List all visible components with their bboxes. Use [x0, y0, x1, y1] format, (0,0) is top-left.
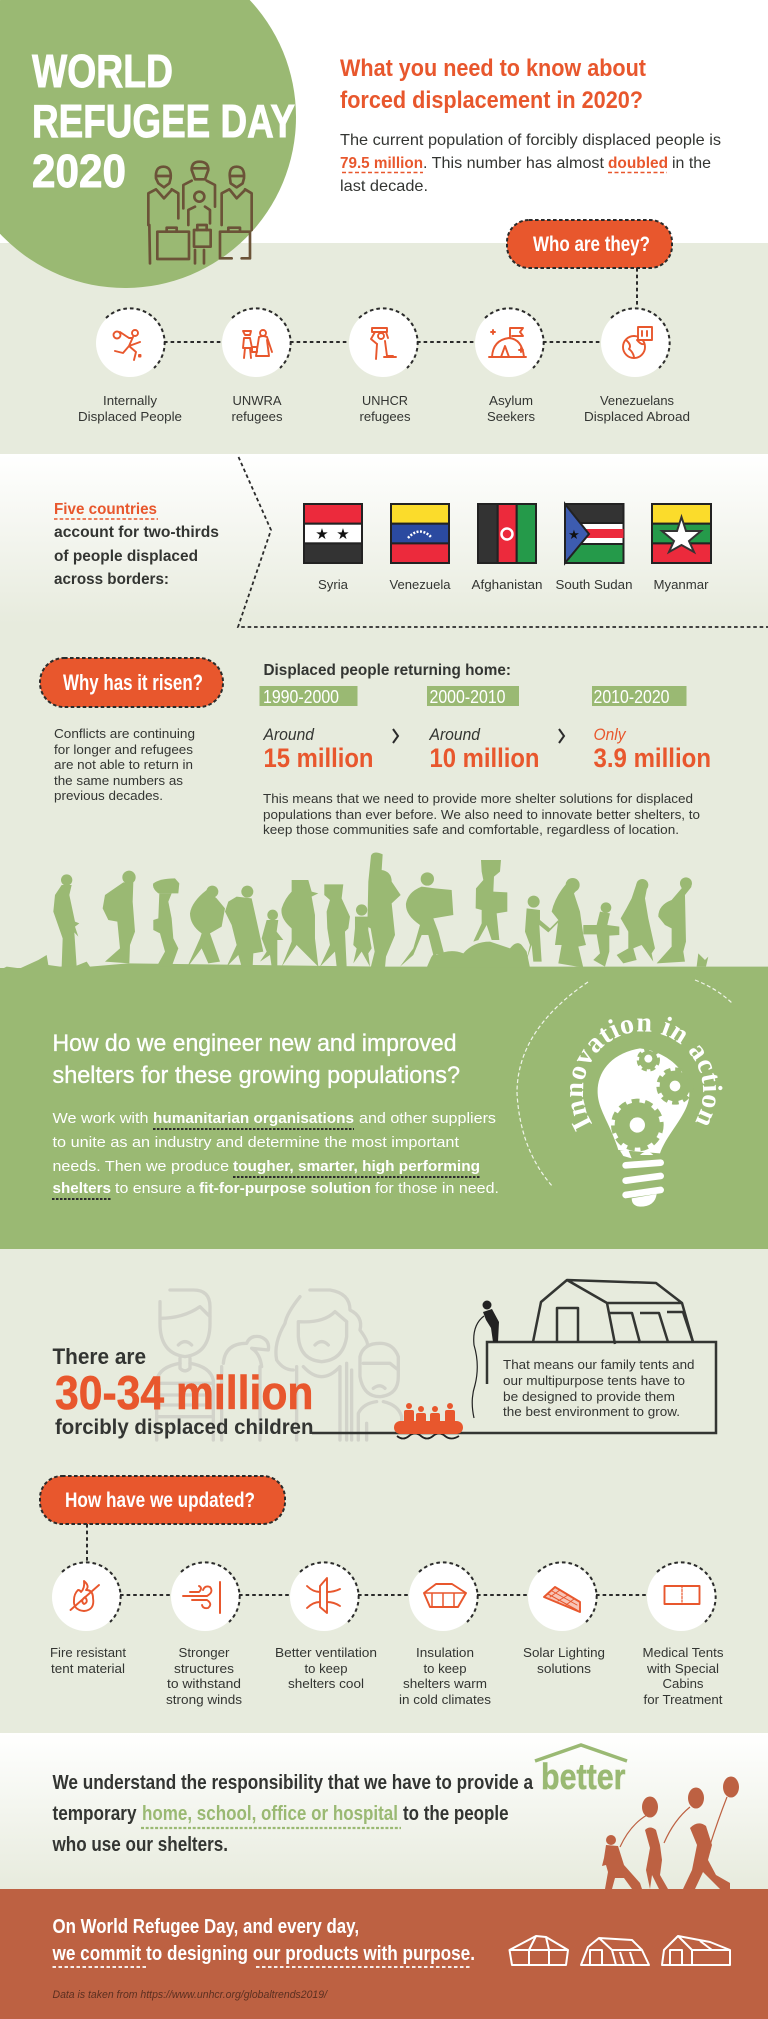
labels: who are they: Seekers — [487, 409, 535, 424]
divider: dashed chevron — [238, 457, 768, 627]
icon: lightbulb with gears — [598, 1048, 690, 1207]
heading: what you need to know — [340, 55, 646, 114]
icon: medical tents — [647, 1562, 716, 1631]
icon: strong winds — [171, 1562, 240, 1631]
text block: conflicts: previous decades. — [54, 788, 163, 803]
text block: five countries: Five countries — [54, 501, 157, 518]
text block: how we work: fit-for-purpose solution — [199, 1180, 371, 1197]
stat: 1990-2000: 1990-2000 — [263, 687, 339, 707]
text block: more shelter solutions: This means that we need to provide more shelter solutions for displaced — [263, 791, 693, 806]
arrow: 2000s to 2010s — [559, 729, 564, 743]
closing statement: we commit to designing our products with purpose. — [52, 1943, 475, 1965]
labels: updates: to withstand — [167, 1676, 241, 1691]
labels: updates: for Treatment — [644, 1692, 723, 1707]
icon: tent two — [581, 1938, 649, 1965]
labels: who are they: UNWRA — [232, 393, 282, 408]
text block: population: 79.5 million — [340, 155, 423, 172]
better with roof — [535, 1745, 627, 1797]
text block: how we work: needs. Then we produce — [52, 1158, 229, 1175]
callout: why has it risen: Why has it risen? — [63, 670, 203, 695]
icon: fire resistant — [52, 1562, 121, 1631]
text block: conflicts: for longer and refugees — [54, 742, 194, 757]
source note: Data is taken from https://www.unhcr.org/globaltrends2019/ — [52, 1989, 328, 2001]
text block: family tents: the best environment to grow. — [503, 1404, 680, 1419]
icon: internally displaced people — [96, 308, 165, 377]
labels: updates: Medical Tents — [642, 1645, 724, 1660]
title: REFUGEE DAY — [32, 95, 295, 147]
flag: South Sudan: ★ — [568, 527, 580, 542]
labels: updates: Stronger — [178, 1645, 230, 1660]
badge: innovation in action — [570, 1016, 722, 1207]
labels: updates: shelters cool — [288, 1676, 364, 1691]
title — [32, 45, 295, 197]
text block: how we work: humanitarian organisations — [153, 1110, 354, 1127]
text block: family tents: That means our family tents and — [503, 1357, 694, 1372]
flag: Syria — [304, 504, 362, 563]
illustration: children with balloons — [602, 1776, 739, 1889]
illustration: person with hose — [472, 1300, 499, 1418]
labels: updates: Insulation — [416, 1645, 474, 1660]
text block: responsibility: We understand the responsibility that we have to provide a — [52, 1772, 534, 1794]
labels: who are they: Internally — [103, 393, 158, 408]
flag: Syria: ★ — [336, 526, 350, 543]
stat: 30-34 million children — [52, 1344, 314, 1439]
labels: updates: shelters warm — [403, 1676, 487, 1691]
text block: how we work — [52, 1110, 499, 1199]
closing statement: On World Refugee Day, and every day, — [52, 1916, 359, 1938]
stat: 30-34 million children: 30-34 million — [55, 1366, 314, 1419]
title: WORLD — [32, 45, 173, 97]
text block: five countries — [54, 501, 219, 588]
text block: how we work: We work with — [52, 1110, 148, 1127]
text block: population: . This number has almost — [423, 155, 605, 172]
callout: how have we updated — [40, 1476, 285, 1524]
icon: solar panel — [528, 1562, 597, 1631]
labels: updates: to keep — [304, 1661, 348, 1676]
text block: population — [340, 132, 721, 195]
callout: who are they: Who are they? — [533, 233, 650, 256]
labels: updates — [50, 1645, 724, 1707]
text block: population: doubled — [608, 155, 668, 172]
text block: conflicts: Conflicts are continuing — [54, 726, 195, 741]
text block: more shelter solutions: populations than ever before. We also need to innovate better shelters, to — [263, 807, 700, 822]
labels: who are they: Asylum — [489, 393, 533, 408]
stat: 1990-2000 — [260, 686, 374, 773]
stat: 30-34 million children: There are — [52, 1344, 146, 1369]
silhouette: walking refugees right — [367, 852, 768, 975]
stat: 1990-2000: Around — [263, 725, 314, 744]
text block: how we work: to ensure a — [115, 1180, 196, 1197]
labels: updates: to keep — [424, 1661, 466, 1676]
icon: ventilation — [290, 1562, 359, 1631]
stat: 2000-2010: 10 million — [430, 743, 540, 773]
icon: asylum seekers — [475, 308, 544, 377]
text block: population: last decade. — [340, 178, 428, 195]
labels: updates: Solar Lighting — [523, 1645, 605, 1660]
icon: UNWRA refugees — [222, 308, 291, 377]
icon: refugee family with suitcases — [148, 162, 252, 263]
labels: updates: in cold climates — [399, 1692, 492, 1707]
labels: who are they — [78, 393, 690, 424]
icon: tent three — [662, 1936, 730, 1965]
callout: who are they — [507, 220, 672, 268]
silhouette: walking refugees left — [0, 871, 380, 975]
text block: responsibility: to the people — [403, 1803, 508, 1825]
labels: who are they: Displaced Abroad — [584, 409, 690, 424]
callout: how have we updated: How have we updated? — [65, 1489, 255, 1512]
flag: Myanmar — [652, 504, 711, 563]
heading: what you need to know: What you need to know about — [340, 55, 646, 82]
text block: responsibility: temporary — [52, 1803, 137, 1825]
text block: five countries: of people displaced — [54, 548, 198, 565]
panel: updates row — [52, 1562, 716, 1631]
icon: Venezuelans displaced abroad — [601, 308, 670, 377]
stat: 2010-2020: 2010-2020 — [594, 687, 670, 707]
arrow: 1990s to 2000s — [393, 729, 398, 743]
stat: 2010-2020 — [592, 686, 711, 773]
stat: 30-34 million children: forcibly displaced children — [55, 1416, 314, 1439]
heading: what you need to know: forced displacement in 2020? — [340, 87, 643, 114]
heading: how do we engineer: How do we engineer new and improved — [52, 1030, 456, 1057]
stat: 2010-2020: Only — [594, 725, 627, 744]
labels: updates: strong winds — [166, 1692, 243, 1707]
labels: updates: with Special — [646, 1661, 719, 1676]
labels: who are they: UNHCR — [362, 393, 408, 408]
illustration: life raft — [394, 1403, 463, 1438]
text block: conflicts: the same numbers as — [54, 773, 184, 788]
labels: updates: Cabins — [662, 1676, 704, 1691]
text block: conflicts: are not able to return in — [54, 757, 193, 772]
text block: family tents: our multipurpose tents have to — [503, 1373, 685, 1388]
connector: who are they — [636, 268, 638, 310]
stat: 2000-2010: 2000-2010 — [430, 687, 506, 707]
text block: population: The current population of forcibly displaced people is — [340, 132, 721, 149]
illustration: tent — [533, 1280, 693, 1344]
labels: countries: Afghanistan — [472, 577, 542, 592]
title: 2020 — [32, 145, 126, 197]
flag: Syria: ★ — [315, 526, 329, 543]
text block: how we work: and other suppliers — [359, 1110, 496, 1127]
labels: updates: tent material — [51, 1661, 125, 1676]
badge: innovation in action: Innovation in action — [570, 1016, 722, 1132]
stat: 2010-2020: 3.9 million — [594, 743, 711, 773]
labels: countries: Syria — [318, 577, 349, 592]
stat: 2000-2010 — [427, 686, 540, 773]
text block: how we work: for those in need. — [375, 1180, 499, 1197]
callout: why has it risen — [40, 658, 223, 707]
stat: 2000-2010: Around — [429, 725, 480, 744]
text block: responsibility: home, school, office or hospital — [142, 1803, 398, 1825]
connector: how have we updated — [86, 1524, 88, 1562]
better with roof: better — [541, 1756, 626, 1797]
labels: who are they: refugees — [360, 409, 411, 424]
text block: five countries: account for two-thirds — [54, 524, 219, 541]
heading: how do we engineer: shelters for these growing populations? — [52, 1062, 460, 1089]
icon: tent one — [510, 1936, 568, 1965]
labels: who are they: refugees — [232, 409, 283, 424]
labels: updates: Fire resistant — [50, 1645, 126, 1660]
text block: conflicts — [54, 726, 195, 803]
labels: who are they: Venezuelans — [600, 393, 674, 408]
text block: family tents: be designed to provide them — [503, 1389, 675, 1404]
heading: how do we engineer — [52, 1030, 460, 1089]
heading: displaced people returning home: Displaced people returning home: — [264, 662, 511, 679]
text block: more shelter solutions: keep those communities safe and comfortable, regardless of location. — [263, 822, 679, 837]
stat: 1990-2000: 15 million — [264, 743, 374, 773]
text block: how we work: shelters — [52, 1180, 111, 1197]
flag: Venezuela — [391, 504, 449, 563]
text block: family tents — [503, 1357, 694, 1419]
text block: how we work: tougher, smarter, high performing — [233, 1158, 480, 1175]
labels: countries: Venezuela — [390, 577, 451, 592]
labels: countries: South Sudan — [556, 577, 632, 592]
text block: responsibility: who use our shelters. — [52, 1834, 228, 1856]
title circle — [0, 0, 296, 288]
flag: Afghanistan — [478, 504, 536, 563]
labels: updates: Better ventilation — [275, 1645, 377, 1660]
text block: how we work: to unite as an industry and determine the most important — [52, 1134, 460, 1151]
labels: updates: structures — [174, 1661, 235, 1676]
text block: responsibility — [52, 1772, 534, 1856]
closing statement — [52, 1916, 475, 1967]
decorative ring: innovation — [517, 980, 732, 1187]
flag: South Sudan — [565, 504, 624, 563]
text block: five countries: across borders: — [54, 571, 169, 588]
icon: insulation tent — [409, 1562, 478, 1631]
labels: countries: Myanmar — [654, 577, 709, 592]
text block: more shelter solutions — [263, 791, 700, 837]
callout box outline — [312, 1342, 716, 1433]
labels: who are they: Displaced People — [78, 409, 182, 424]
labels: countries — [318, 577, 709, 592]
icon: UNHCR refugees — [349, 308, 418, 377]
panel: who are they row — [96, 308, 670, 377]
labels: updates: solutions — [537, 1661, 592, 1676]
text block: population: in the — [672, 155, 711, 172]
illustration: sad family outline — [157, 1290, 402, 1440]
